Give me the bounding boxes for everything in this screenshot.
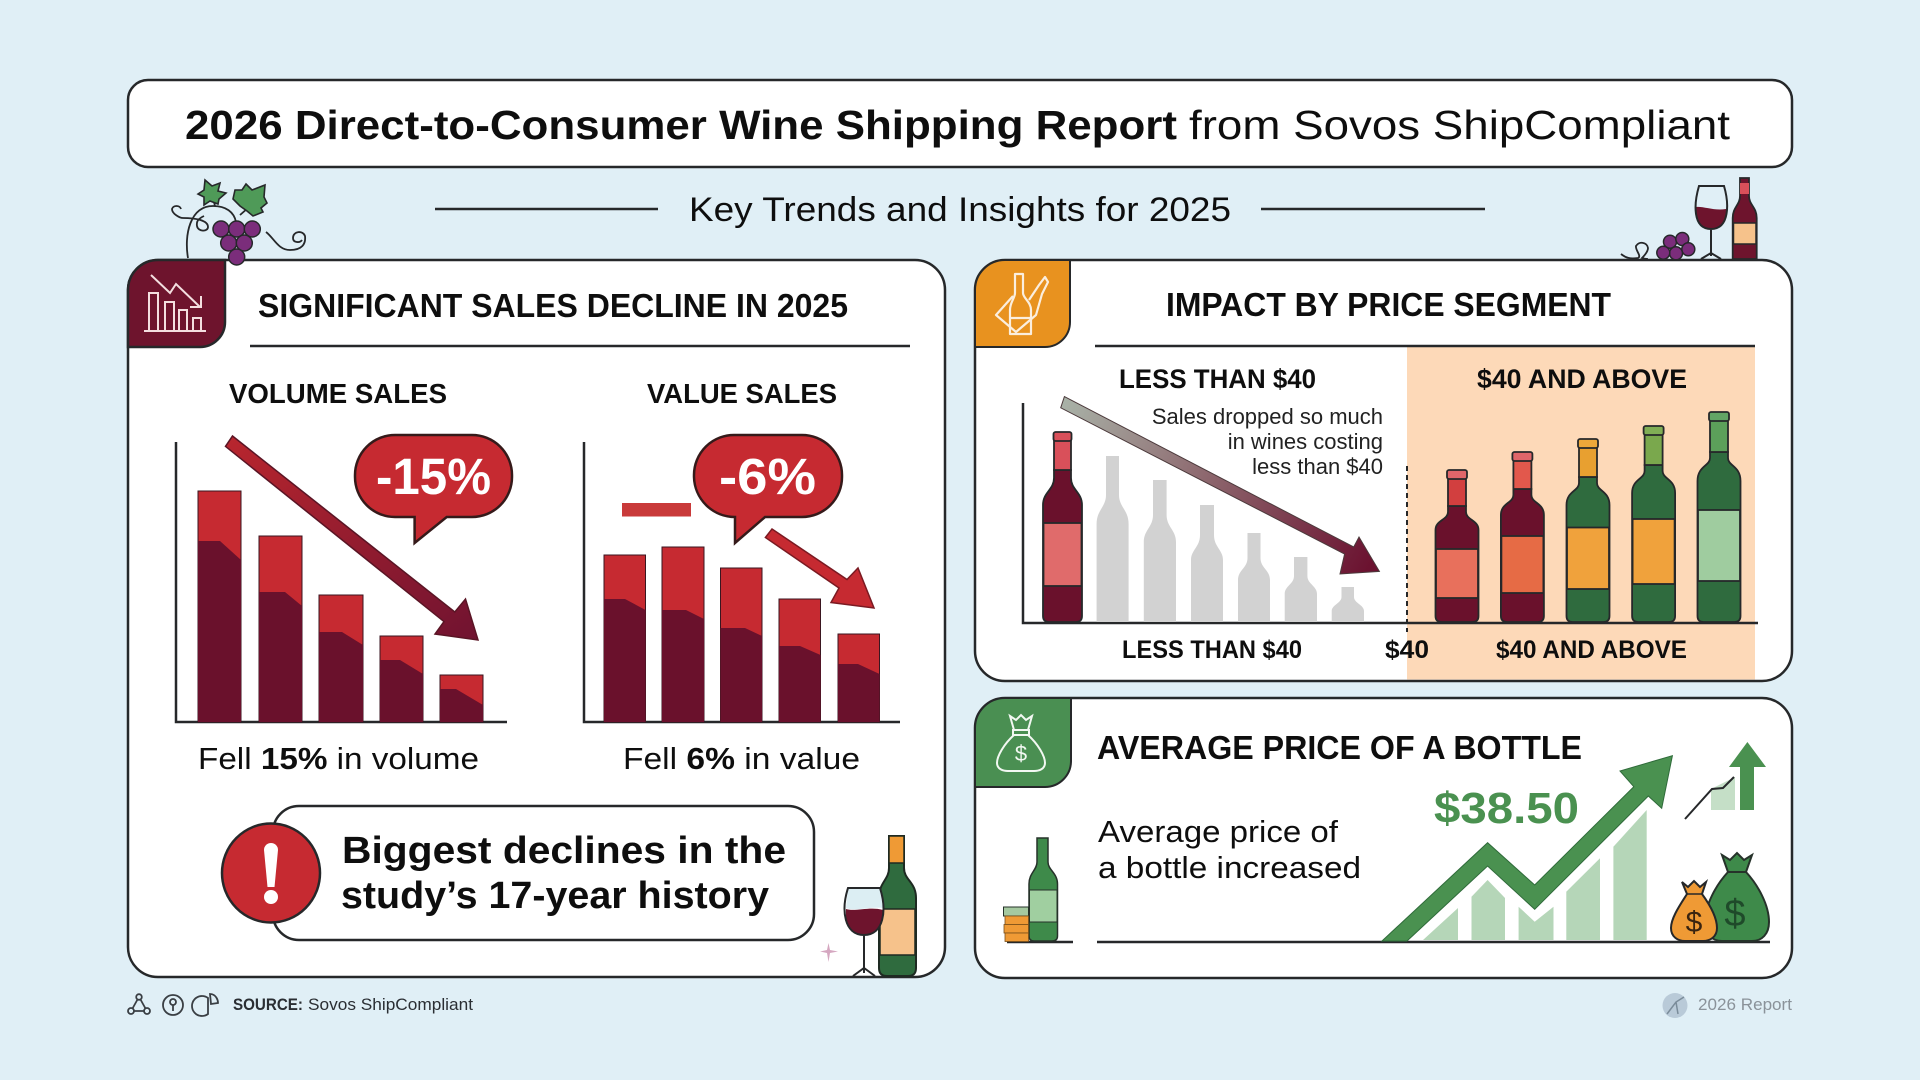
icon: small up trend — [1685, 742, 1766, 819]
chart axes — [1023, 403, 1758, 623]
arrow — [765, 529, 874, 608]
icon: money bag tab — [975, 698, 1071, 787]
callout: biggest declines — [222, 806, 814, 940]
callout -15%: -15% — [376, 448, 491, 505]
leaves — [198, 180, 267, 216]
panel: significant sales decline — [128, 260, 945, 977]
decoration: grape vine — [172, 180, 305, 265]
bottle 1 — [1436, 470, 1478, 622]
value sales chart — [584, 378, 900, 776]
icon: bottles tab — [975, 260, 1070, 347]
title text: from Sovos ShipCompliant — [1189, 102, 1731, 148]
baseline — [1007, 941, 1770, 943]
annotation: Sales dropped so much — [1152, 404, 1383, 429]
trend bars — [1423, 810, 1647, 940]
panel heading: IMPACT BY PRICE SEGMENT — [1166, 286, 1611, 323]
price figure: $38.50 — [1434, 784, 1579, 833]
annotation — [1152, 404, 1383, 479]
sparkle — [820, 943, 838, 962]
callout -15% — [355, 435, 512, 543]
axis labels: LESS THAN $40 — [1122, 636, 1302, 664]
panel: average price of a bottle — [975, 698, 1792, 978]
wine glass — [1696, 186, 1727, 259]
axis labels: $40 — [1385, 636, 1429, 664]
subtitle: Key Trends and Insights for 2025 — [689, 191, 1231, 229]
icon: money bags — [1671, 853, 1769, 941]
annotation: less than $40 — [1252, 454, 1383, 479]
axis labels: $40 AND ABOVE — [1496, 636, 1687, 664]
callout -6% — [694, 435, 842, 543]
callout: biggest declines: Biggest declines in the — [342, 830, 786, 872]
annotation: in wines costing — [1228, 429, 1383, 454]
peach highlight region — [1407, 346, 1755, 680]
axis labels — [1122, 636, 1687, 664]
footer: report tag — [1662, 993, 1792, 1018]
chart heading: VOLUME SALES — [229, 378, 447, 409]
footer: report tag: 2026 Report — [1698, 995, 1792, 1014]
rising arrow — [1382, 756, 1672, 941]
panel heading: AVERAGE PRICE OF A BOTTLE — [1097, 729, 1582, 766]
footer: source — [128, 994, 473, 1016]
icon: pie — [192, 994, 218, 1016]
body text — [1098, 814, 1361, 885]
bars — [604, 547, 880, 722]
panel heading: SIGNIFICANT SALES DECLINE IN 2025 — [258, 287, 848, 324]
icon: money bags: $ — [1724, 893, 1746, 935]
decoration: glass, bottle and grapes — [1621, 178, 1757, 260]
panel: impact by price segment — [975, 260, 1792, 681]
grapes — [213, 221, 260, 265]
body text: Average price of — [1098, 814, 1338, 849]
icon: exclamation — [222, 824, 320, 922]
rising bottles — [1436, 412, 1740, 622]
bars — [198, 491, 483, 722]
chart heading: VALUE SALES — [647, 378, 837, 409]
icon: network — [128, 994, 150, 1014]
footer: source: Sovos ShipCompliant — [308, 995, 473, 1014]
arrow: falling sales — [1061, 397, 1379, 574]
title banner — [128, 80, 1792, 167]
icon: money bag tab: $ — [1015, 741, 1027, 766]
bottle 3 — [1566, 439, 1610, 622]
callout: biggest declines: study’s 17-year history — [341, 875, 769, 917]
flat marker bar — [622, 503, 691, 516]
volume sales chart — [176, 378, 512, 776]
icon: bottle and glass — [845, 836, 916, 976]
icon: money bags: $ — [1686, 906, 1703, 939]
caption: Fell 6% in value — [623, 741, 860, 776]
arrow — [226, 436, 478, 640]
icon: declining chart tab — [128, 260, 225, 347]
title text: 2026 Direct-to-Consumer Wine Shipping Report — [185, 102, 1177, 148]
segment label: $40 and above: $40 AND ABOVE — [1477, 364, 1687, 394]
grapes — [1657, 232, 1695, 260]
segment label: less than $40: LESS THAN $40 — [1119, 364, 1316, 394]
caption: Fell 15% in volume — [198, 741, 479, 776]
bottle 2 — [1501, 452, 1544, 622]
bottle 4 — [1632, 426, 1675, 622]
faded bottles — [1097, 456, 1364, 622]
icon: bulb — [163, 995, 183, 1015]
footer: source: SOURCE: — [233, 995, 303, 1014]
body text: a bottle increased — [1098, 850, 1361, 885]
icon: bottle and coins — [1004, 838, 1058, 942]
bottle 5 — [1698, 412, 1740, 622]
wine bottle — [1733, 178, 1757, 259]
large red bottle — [1043, 432, 1082, 622]
callout -6%: -6% — [719, 448, 816, 505]
